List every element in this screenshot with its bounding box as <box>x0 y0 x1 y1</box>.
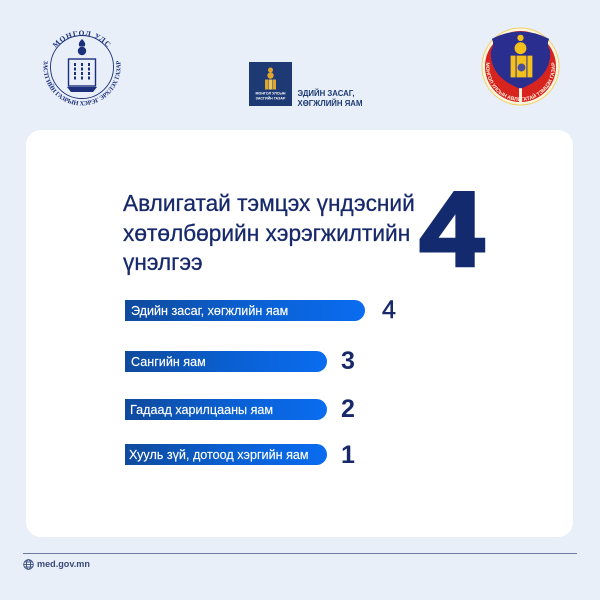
icon: globe <box>23 559 34 570</box>
heading: үнэлгээ <box>123 249 203 275</box>
logo: ministry of justice seal: МОНГОЛ УЛС <box>52 30 111 48</box>
value 4: 4 <box>382 296 396 324</box>
value 1: 1 <box>341 441 355 469</box>
panel: main card <box>26 130 573 537</box>
bar: finance <box>125 351 327 372</box>
bar: justice and internal affairs: Хууль зүй, дотоод хэргийн яам <box>129 448 309 462</box>
ministry name: ХӨГЖЛИЙН ЯАМ <box>298 98 362 108</box>
logo: ministry of economy and development <box>249 62 362 108</box>
logo: ministry of justice seal: ЗАСТГИЙН ГАЗРЫН ХЭРЭГ ЭРХЛЭХ ГАЗАР <box>44 60 120 106</box>
logo: anti-corruption agency emblem <box>482 28 560 106</box>
footer divider <box>23 553 577 554</box>
bar: economy and development: Эдийн засаг, хөгжлийн яам <box>131 304 288 318</box>
value 2: 2 <box>341 395 355 423</box>
footer: website <box>23 558 90 570</box>
website url: med.gov.mn <box>37 558 90 568</box>
bar: justice and internal affairs <box>125 444 327 464</box>
bar: finance: Сангийн яам <box>131 355 206 369</box>
logo tile <box>249 62 292 106</box>
bar: foreign affairs: Гадаад харилцааны яам <box>130 403 273 417</box>
heading: Авлигатай тэмцэх үндэсний <box>123 190 415 216</box>
value 3: 3 <box>341 347 355 375</box>
ministry name <box>298 88 362 108</box>
logo: ministry of justice seal <box>44 30 120 106</box>
logo tile: МОНГОЛ УЛСЫН <box>256 92 286 96</box>
logo: anti-corruption agency emblem: МОНГОЛ УЛСЫН АВЛИГАТАЙ ТЭМЦЭХ ГАЗАР <box>486 62 556 101</box>
bar: economy and development <box>125 300 365 320</box>
bar: foreign affairs <box>125 399 327 420</box>
big number 4: 4 <box>420 171 484 288</box>
heading: хөтөлбөрийн хэрэгжилтийн <box>123 220 410 246</box>
logo tile: ЗАСГИЙН ГАЗАР <box>256 96 286 100</box>
heading <box>122 190 415 276</box>
ministry name: ЭДИЙН ЗАСАГ, <box>298 88 355 98</box>
